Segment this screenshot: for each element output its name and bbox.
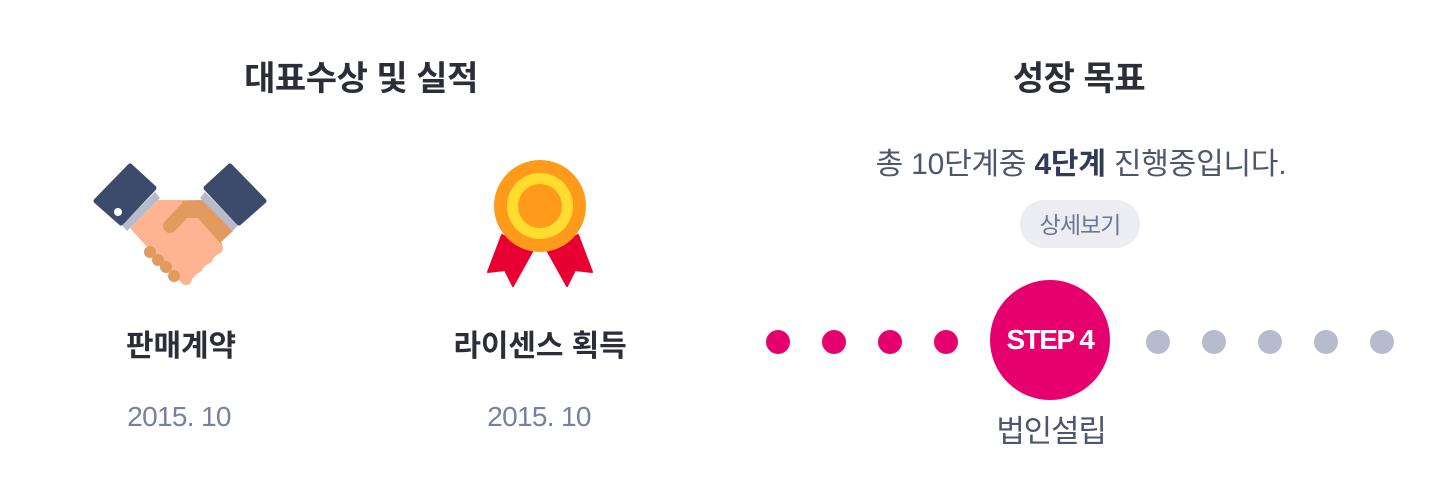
heading: growth target: 성장 목표 <box>1013 60 1145 98</box>
current step circle <box>990 280 1110 400</box>
button: details <box>1020 200 1140 248</box>
award label: 라이센스 획득 <box>453 330 627 363</box>
award date: 2015. 10 <box>127 401 231 432</box>
progress text: 총 10단계중 4단계 진행중입니다. <box>876 148 1286 181</box>
panel: award contract <box>94 164 266 432</box>
award label: 판매계약 <box>126 330 236 363</box>
award date: 2015. 10 <box>487 401 591 432</box>
step progress <box>766 280 1394 449</box>
icon: handshake <box>94 164 266 285</box>
step name: 법인설립 <box>996 414 1106 449</box>
icon: medal <box>487 160 593 287</box>
button: details: 상세보기 <box>1040 212 1120 238</box>
heading: awards: 대표수상 및 실적 <box>244 60 478 98</box>
current step circle: STEP 4 <box>1006 324 1093 355</box>
panel: award license <box>453 160 627 432</box>
